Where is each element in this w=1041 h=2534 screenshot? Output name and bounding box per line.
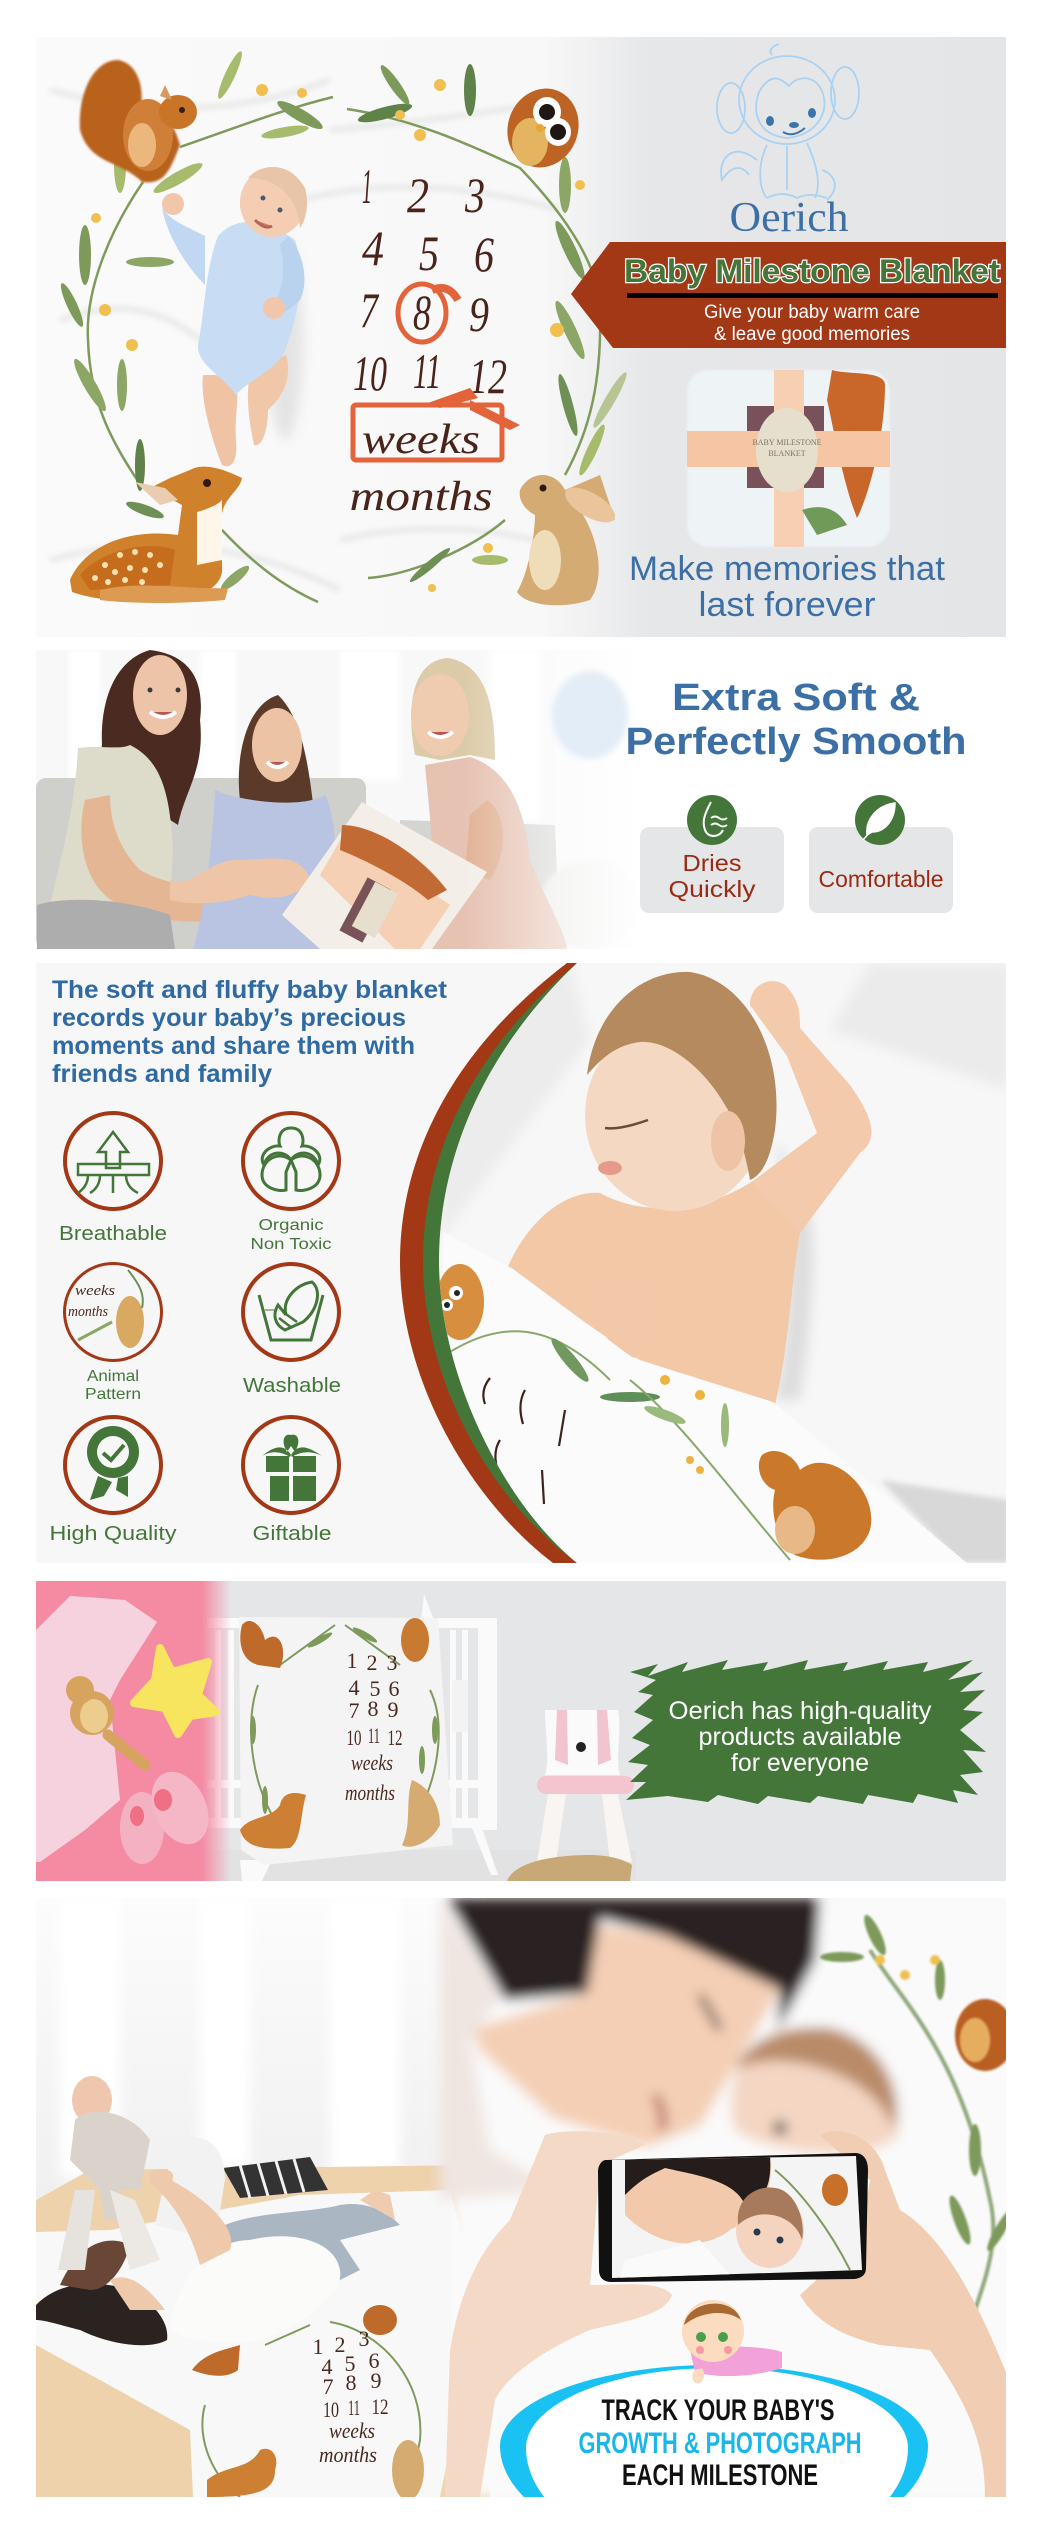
callout text xyxy=(668,1697,932,1777)
feature labels xyxy=(50,1217,341,1545)
icon: organic cotton xyxy=(262,1128,320,1190)
numbers grid: 6 xyxy=(474,226,494,282)
hanging blanket: 8 xyxy=(368,1696,378,1721)
icon: animal pattern: months xyxy=(68,1304,108,1320)
illustration: left vine xyxy=(57,49,333,602)
photo: baby on blanket xyxy=(162,161,313,466)
hanging blanket: weeks xyxy=(351,1750,393,1775)
illustration: owl xyxy=(507,88,579,168)
blanket print xyxy=(436,1264,871,1560)
callout text: products available xyxy=(698,1723,902,1751)
photo: three women on sofa xyxy=(36,650,576,949)
numbers grid: 5 xyxy=(419,225,439,281)
numbers grid: 8 xyxy=(413,284,431,340)
callout text: Oerich has high-quality xyxy=(668,1697,932,1725)
banner: Baby Milestone Blanket xyxy=(571,242,1009,348)
photo: family on bed xyxy=(36,1898,490,2497)
stool and bunny pillow xyxy=(507,1710,634,1881)
mini blanket on bed: 3 xyxy=(358,2326,370,2351)
photo: folded blanket package: BLANKET xyxy=(768,449,806,458)
mini blanket on bed: 8 xyxy=(346,2370,356,2395)
feature card: comfortable xyxy=(809,795,953,913)
illustration: squirrel xyxy=(80,60,197,182)
panel: features xyxy=(36,963,1010,1563)
numbers grid xyxy=(354,170,506,394)
heading: Perfectly Smooth xyxy=(626,721,966,763)
mini blanket on bed: weeks xyxy=(329,2418,375,2443)
booties xyxy=(120,1763,220,1864)
photo: folded blanket package xyxy=(687,370,890,547)
icon: high quality ribbon xyxy=(87,1426,139,1500)
heading text: friends and family xyxy=(52,1060,272,1088)
numbers grid: 7 xyxy=(360,282,379,338)
icon: animal pattern: weeks xyxy=(75,1283,115,1299)
numbers grid: 12 xyxy=(469,348,507,404)
illustration: rabbit xyxy=(517,475,620,605)
tagline: last forever xyxy=(698,586,876,624)
illustration: right vine xyxy=(347,62,630,592)
hanging blanket: 12 xyxy=(388,1725,402,1750)
panel: nursery xyxy=(36,1581,1009,1881)
weeks box xyxy=(353,388,520,463)
hanging blanket: 11 xyxy=(368,1723,380,1748)
photo: folded blanket package: BABY MILESTONE xyxy=(752,438,822,447)
rug xyxy=(507,1855,632,1881)
mini blanket on bed xyxy=(192,2305,440,2500)
feature labels: Washable xyxy=(243,1375,341,1397)
feature card: comfortable: Comfortable xyxy=(818,866,944,892)
heading: Extra Soft & xyxy=(672,677,920,719)
hanging blanket: 6 xyxy=(388,1676,400,1701)
tagline: Make memories that xyxy=(629,550,946,588)
curved green band xyxy=(423,963,577,1563)
blanket held on lap xyxy=(282,802,487,949)
numbers grid: 3 xyxy=(464,167,485,223)
panel: family photos xyxy=(36,1898,1016,2534)
feature icons xyxy=(65,1113,339,1513)
blurred vine and owl background xyxy=(820,1913,1016,2310)
left pink photo xyxy=(36,1581,231,1881)
logo: monkey mark xyxy=(717,44,859,200)
banner: Baby Milestone Blanket: Baby Milestone Blanket xyxy=(624,253,1000,289)
hanging blanket: 7 xyxy=(348,1698,360,1723)
rattle xyxy=(66,1676,145,1765)
cartoon baby xyxy=(682,2300,782,2383)
icon: washable xyxy=(259,1282,323,1340)
hanging blanket: 9 xyxy=(388,1697,398,1722)
tagline xyxy=(632,555,945,616)
heading text: moments and share them with xyxy=(52,1032,415,1060)
milestone message: TRACK YOUR BABY'S xyxy=(602,2394,834,2427)
ring around number eight xyxy=(398,284,458,342)
torso xyxy=(507,1181,800,1405)
numbers grid: 1 xyxy=(362,158,372,214)
hands holding phone xyxy=(445,2131,1009,2497)
months label: months xyxy=(350,474,492,520)
weeks box: weeks xyxy=(362,417,480,463)
blurred mother and baby xyxy=(440,1898,1012,2497)
mini blanket on bed: 4 xyxy=(322,2354,332,2379)
numbers grid: 2 xyxy=(407,167,429,223)
feature labels: Pattern xyxy=(85,1386,141,1403)
heading text xyxy=(52,976,448,1088)
heading text: The soft and fluffy baby blanket xyxy=(52,976,448,1004)
icon: feather xyxy=(855,795,905,845)
hanging blanket xyxy=(239,1617,453,1865)
feature labels: High Quality xyxy=(50,1523,176,1545)
numbers grid: 9 xyxy=(469,286,489,342)
star xyxy=(134,1648,216,1734)
feature labels: Breathable xyxy=(59,1223,167,1245)
mini blanket on bed: 9 xyxy=(370,2368,382,2393)
brush stroke callout xyxy=(626,1660,986,1804)
milestone message: GROWTH & PHOTOGRAPH xyxy=(578,2427,862,2460)
banner: Baby Milestone Blanket: & leave good memories xyxy=(714,324,910,345)
icon: water drop xyxy=(687,795,737,845)
panel: extra soft xyxy=(36,650,1009,950)
mini blanket on bed: 7 xyxy=(322,2374,334,2399)
mini blanket on bed: 11 xyxy=(348,2395,360,2420)
illustration: deer xyxy=(70,467,242,603)
phone xyxy=(598,2153,868,2282)
decorative balloon xyxy=(552,671,628,759)
feature labels: Organic xyxy=(258,1217,324,1234)
onesie xyxy=(36,1596,157,1862)
mini blanket on bed: 6 xyxy=(368,2348,380,2373)
icon: gift box xyxy=(262,1435,322,1501)
feature labels: Non Toxic xyxy=(250,1236,332,1253)
numbers grid: 11 xyxy=(413,343,441,399)
icon: breathable xyxy=(78,1132,149,1193)
mini blanket on bed: 12 xyxy=(372,2394,388,2419)
photo: sleeping baby xyxy=(430,963,1010,1563)
hanging blanket: 2 xyxy=(366,1650,378,1675)
numbers grid: 10 xyxy=(353,345,387,401)
feature card: dries quickly: Dries xyxy=(682,850,742,876)
callout text: for everyone xyxy=(731,1749,869,1777)
hanging blanket: months xyxy=(345,1780,395,1805)
feature card: dries quickly xyxy=(640,795,784,913)
mini blanket on bed: months xyxy=(319,2442,377,2467)
milestone message: EACH MILESTONE xyxy=(622,2459,818,2492)
raised arm xyxy=(750,981,871,1233)
hanging blanket: 4 xyxy=(348,1675,360,1700)
crib xyxy=(207,1594,498,1881)
mini blanket on bed: 10 xyxy=(323,2397,339,2422)
feature labels: Giftable xyxy=(252,1523,332,1545)
logo wordmark: Oerich xyxy=(730,195,848,241)
heading text: records your baby’s precious xyxy=(52,1004,406,1032)
icon: animal pattern xyxy=(65,1264,161,1360)
hanging blanket: 3 xyxy=(386,1650,398,1675)
hanging blanket: 5 xyxy=(370,1676,380,1701)
hanging blanket: 10 xyxy=(346,1725,362,1750)
curved red band xyxy=(400,963,577,1563)
head xyxy=(585,1042,748,1211)
feature labels: Animal xyxy=(87,1368,139,1385)
hanging blanket: 1 xyxy=(346,1648,358,1673)
heading xyxy=(626,677,966,763)
mini blanket on bed: 1 xyxy=(312,2334,324,2359)
cyan speech dome xyxy=(500,2365,928,2534)
mini blanket on bed: 2 xyxy=(334,2332,346,2357)
banner: Baby Milestone Blanket: Give your baby warm care xyxy=(704,302,920,323)
milestone message xyxy=(578,2394,862,2492)
feature card: dries quickly: Quickly xyxy=(668,876,756,902)
mini blanket on bed: 5 xyxy=(344,2351,356,2376)
numbers grid: 4 xyxy=(362,220,384,276)
panel: hero blanket xyxy=(36,37,1009,637)
